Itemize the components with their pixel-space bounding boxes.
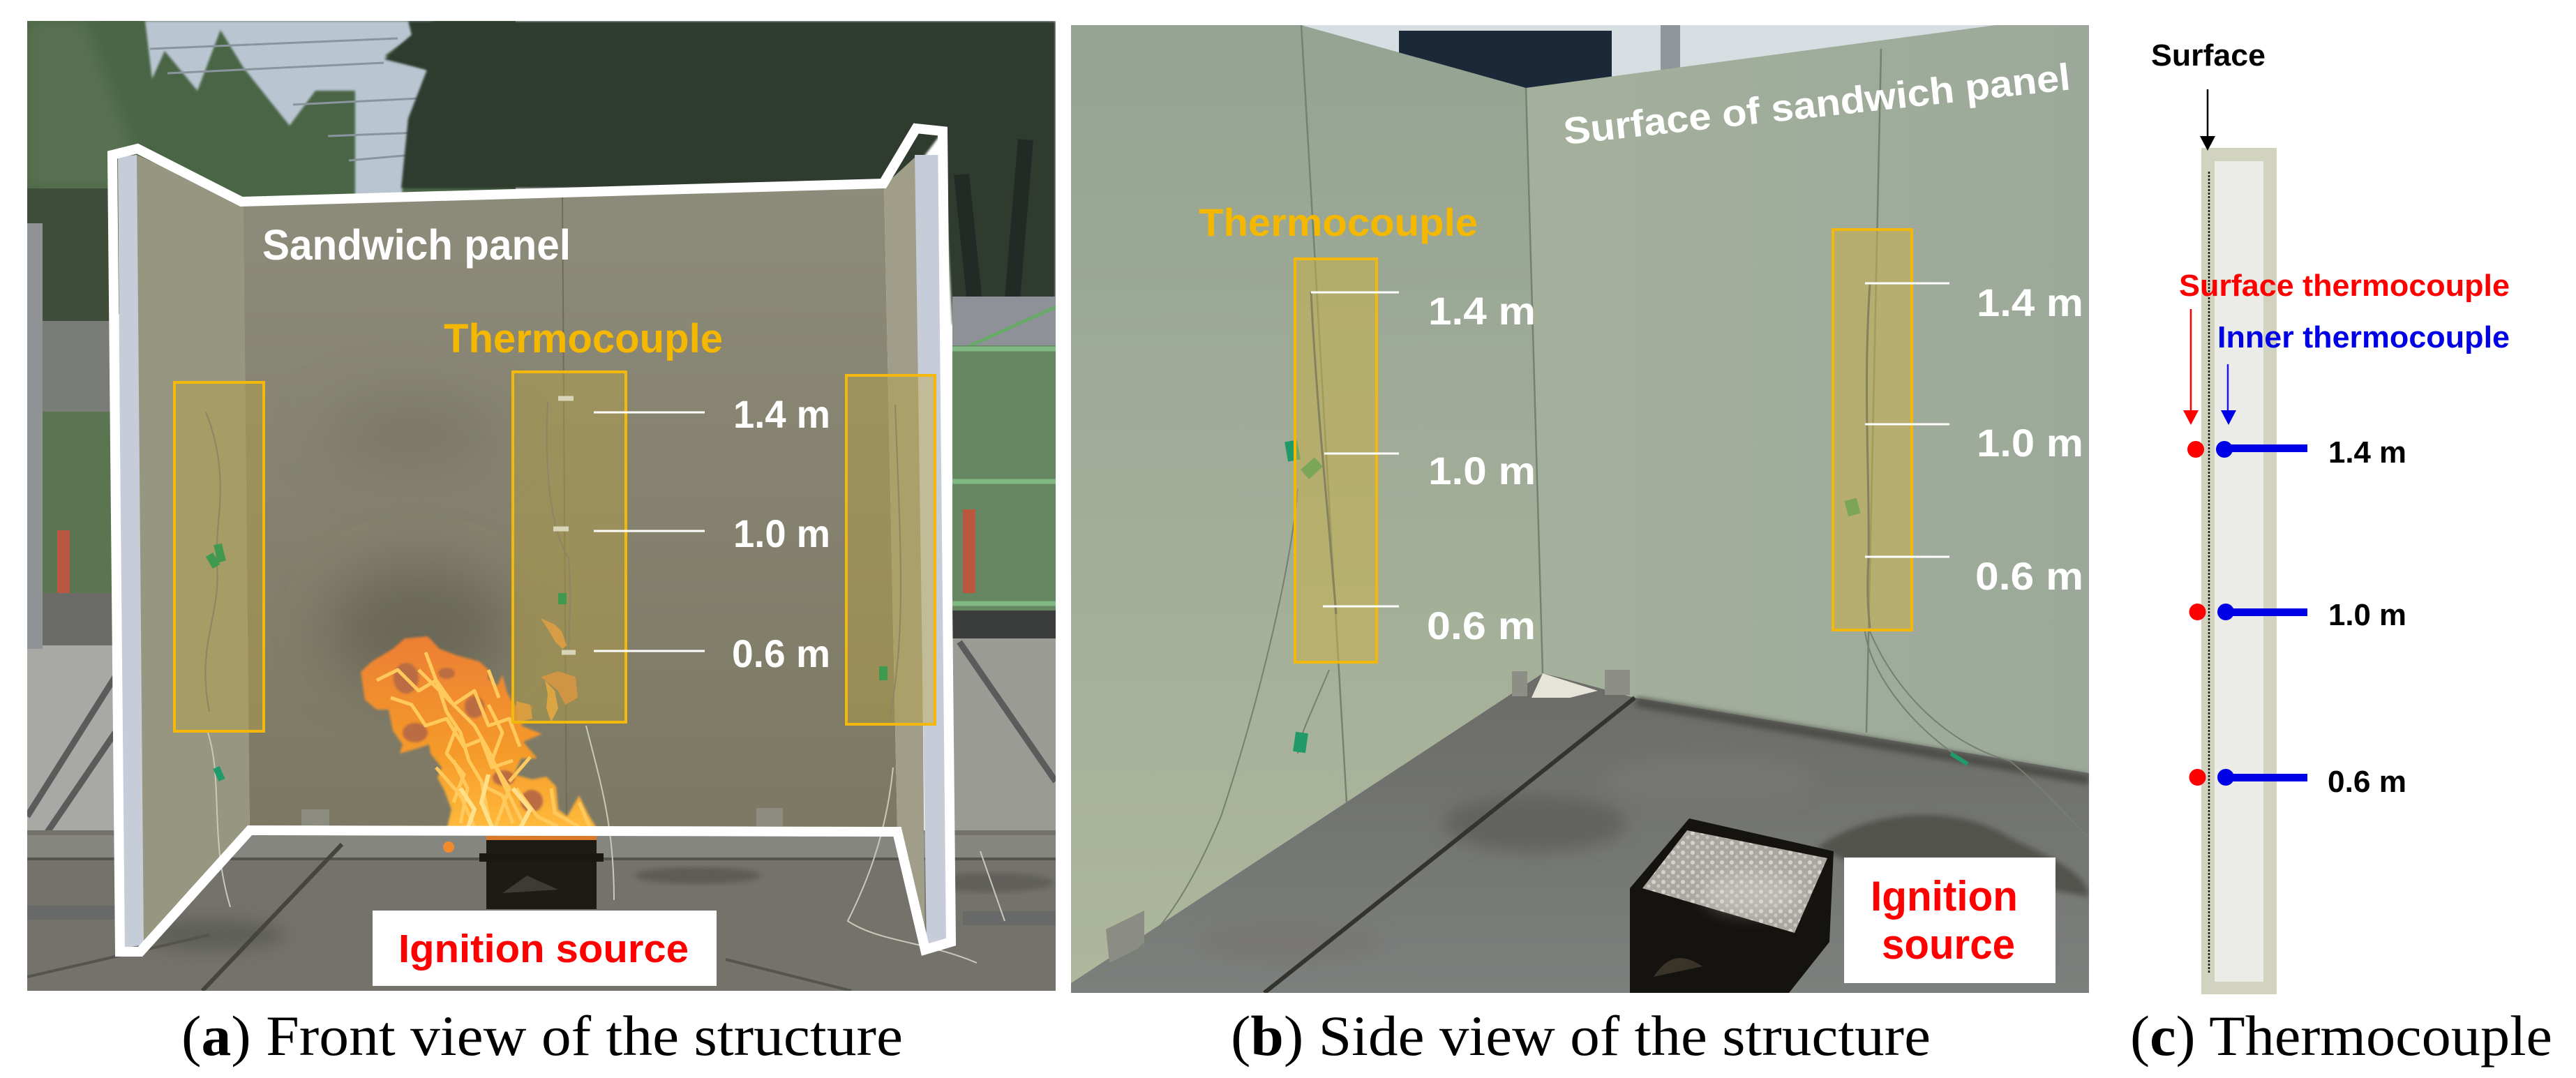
height markers right: 0.6 m <box>1975 554 2083 598</box>
thermocouple tags <box>553 398 576 652</box>
flame wisps in thermocouple box <box>541 618 567 649</box>
background left side <box>27 188 118 321</box>
height markers: 0.6 m <box>732 631 830 675</box>
sandwich panel outline <box>112 128 951 952</box>
panel section <box>2201 148 2277 994</box>
brackets <box>1106 911 1144 963</box>
thermocouple highlight right <box>1833 230 1912 630</box>
panel c: thermocouple diagram <box>2151 38 2510 994</box>
smoke staining <box>367 410 456 455</box>
lighter conifer fringe <box>28 22 128 188</box>
power lines <box>150 38 433 160</box>
ignition source label: source <box>1882 921 2015 968</box>
caption a: (a) Front view of the structure <box>181 1004 903 1068</box>
right tree canopy <box>384 21 1056 324</box>
panel a: front view photograph <box>27 21 1056 991</box>
height markers: 1.4 m <box>733 392 830 436</box>
burner tray with gravel <box>1630 818 1834 993</box>
label: surface thermocouple: Surface thermocouple <box>2179 269 2510 303</box>
marker row 0.6 m <box>2189 765 2406 799</box>
panel b: side view photograph <box>1071 25 2089 993</box>
tree trunks <box>954 139 1033 297</box>
brackets <box>301 809 329 826</box>
wires <box>208 726 1005 963</box>
height markers right: 1.4 m <box>1977 280 2083 324</box>
green tags <box>209 544 883 680</box>
arrow: inner thermocouple <box>2221 364 2236 425</box>
ignition source label: Ignition source <box>398 927 689 971</box>
caption c: (c) Thermocouple <box>2130 1004 2552 1068</box>
height markers right: 1.0 m <box>1977 421 2083 465</box>
label: surface of sandwich panel: Surface of sandwich panel <box>1562 56 2072 153</box>
burner tray <box>479 836 604 909</box>
label: surface: Surface <box>2151 38 2266 73</box>
marker row 1.0 m: 1.0 m <box>2328 598 2406 632</box>
thermocouple wires <box>1311 283 1870 628</box>
dark gaps in flame <box>394 663 543 812</box>
walls <box>240 186 897 828</box>
panel seam <box>562 195 567 828</box>
marker row 1.4 m: 1.4 m <box>2328 435 2406 470</box>
ignition source label <box>373 911 717 986</box>
wires <box>1088 488 2089 977</box>
marker row 0.6 m: 0.6 m <box>2328 765 2406 799</box>
label: thermocouple: Thermocouple <box>1199 200 1478 244</box>
height markers: 1.0 m <box>733 511 830 555</box>
thermocouple highlight right <box>846 375 935 724</box>
label: sandwich panel: Sandwich panel <box>262 221 571 269</box>
flame <box>361 618 598 853</box>
height markers right <box>1865 280 2083 598</box>
height markers left <box>1311 289 1536 647</box>
height markers left: 1.4 m <box>1428 289 1536 333</box>
marker row 1.4 m <box>2187 435 2406 470</box>
marker row 1.0 m <box>2189 598 2406 632</box>
height markers left: 0.6 m <box>1427 604 1536 647</box>
floor <box>27 830 1056 991</box>
arrow: surface thermocouple <box>2183 309 2199 425</box>
bright filaments <box>377 652 590 827</box>
label: thermocouple: Thermocouple <box>444 316 723 361</box>
height markers left: 1.0 m <box>1428 449 1536 493</box>
seams <box>1301 25 1881 802</box>
sky <box>145 21 434 195</box>
ignition source label: Ignition <box>1871 873 2018 920</box>
label: inner thermocouple: Inner thermocouple <box>2217 320 2510 354</box>
stains on the floor <box>1817 815 2089 897</box>
wall base shadow <box>1636 702 2089 780</box>
arrow: surface <box>2200 89 2215 151</box>
background right side <box>952 297 1056 345</box>
thermocouple wires <box>205 401 901 719</box>
thermocouple highlight centre <box>513 372 626 722</box>
ignition source label <box>1844 858 2055 983</box>
thermocouple highlight left <box>174 382 264 731</box>
caption b: (b) Side view of the structure <box>1231 1004 1931 1068</box>
floor joint <box>1264 698 1635 993</box>
thermocouple highlight left <box>1295 259 1377 662</box>
height markers <box>594 392 830 675</box>
green tags <box>1291 441 1855 752</box>
